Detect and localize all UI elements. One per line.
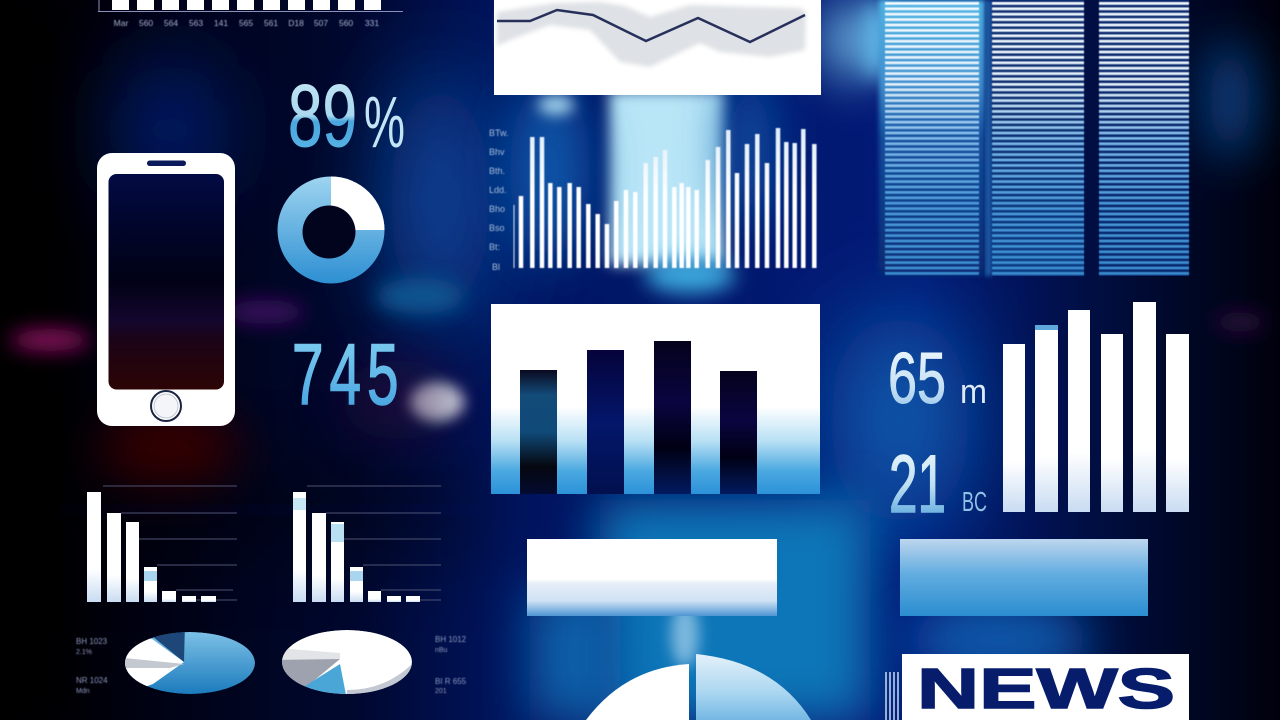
top left bar chart: 564 — [164, 18, 178, 28]
news banner: NEWS — [917, 657, 1175, 720]
pie legend: right: 201 — [435, 688, 447, 695]
top left bar chart: 560 — [339, 18, 353, 28]
thin bar chart: BTw. — [489, 128, 509, 138]
large bar panel — [491, 304, 820, 494]
top left bar chart: 507 — [314, 18, 328, 28]
pie legend: right: BI R 655 — [435, 677, 467, 686]
stat: 65 m: 65 — [888, 339, 946, 419]
top left bar chart: D18 — [288, 18, 304, 28]
line chart panel — [494, 0, 821, 95]
thin bar chart: Bt: — [489, 242, 500, 252]
pie chart: right — [282, 630, 412, 694]
stat: 89 percent: % — [364, 83, 405, 163]
stat: 21 BC: BC — [962, 486, 987, 517]
top left bar chart: 141 — [214, 18, 228, 28]
pie legend: left: 2.1% — [76, 649, 92, 656]
top left bar chart: 565 — [239, 18, 253, 28]
bar chart: right — [1003, 302, 1189, 512]
news banner — [902, 654, 1189, 720]
bar chart: lower left 1 — [87, 486, 237, 602]
white gradient block — [527, 539, 777, 616]
thin bar chart: Bhv — [489, 147, 505, 157]
donut chart — [278, 176, 384, 284]
bar chart: lower left 2 — [293, 486, 441, 602]
stat: 745: 745 — [292, 327, 405, 423]
blue gradient block — [900, 539, 1148, 616]
top left bar chart: Mar — [114, 18, 128, 28]
pie legend: left: NR 1024 — [76, 676, 108, 685]
thin bar chart — [489, 128, 814, 272]
thin bar chart: Bso — [489, 223, 505, 233]
pie legend: left: Mdn — [76, 688, 90, 695]
stat: 65 m: m — [960, 373, 987, 411]
pie legend: right — [435, 635, 467, 695]
small vertical lines beside news — [886, 672, 898, 720]
thin bar chart: Bl — [492, 262, 500, 272]
stripe columns — [879, 0, 1189, 276]
top left bar chart: 563 — [189, 18, 203, 28]
icon: smartphone — [97, 153, 235, 426]
top left bar chart: 560 — [139, 18, 153, 28]
top left bar chart: 331 — [365, 18, 379, 28]
pie chart: left — [125, 632, 255, 694]
thin bar chart: Bho — [489, 204, 505, 214]
top left bar chart — [98, 0, 403, 28]
top left bar chart: 561 — [264, 18, 278, 28]
thin bar chart: Bth. — [489, 166, 505, 176]
thin bar chart: Ldd. — [489, 185, 507, 195]
pie legend: left: BH 1023 — [76, 637, 108, 646]
pie legend: right: nBu — [435, 647, 448, 654]
bottom pie chart — [586, 654, 811, 720]
pie legend: right: BH 1012 — [435, 635, 467, 644]
stat: 89 percent: 89 — [288, 66, 357, 165]
pie legend: left — [76, 637, 108, 695]
stat: 21 BC: 21 — [889, 439, 946, 530]
